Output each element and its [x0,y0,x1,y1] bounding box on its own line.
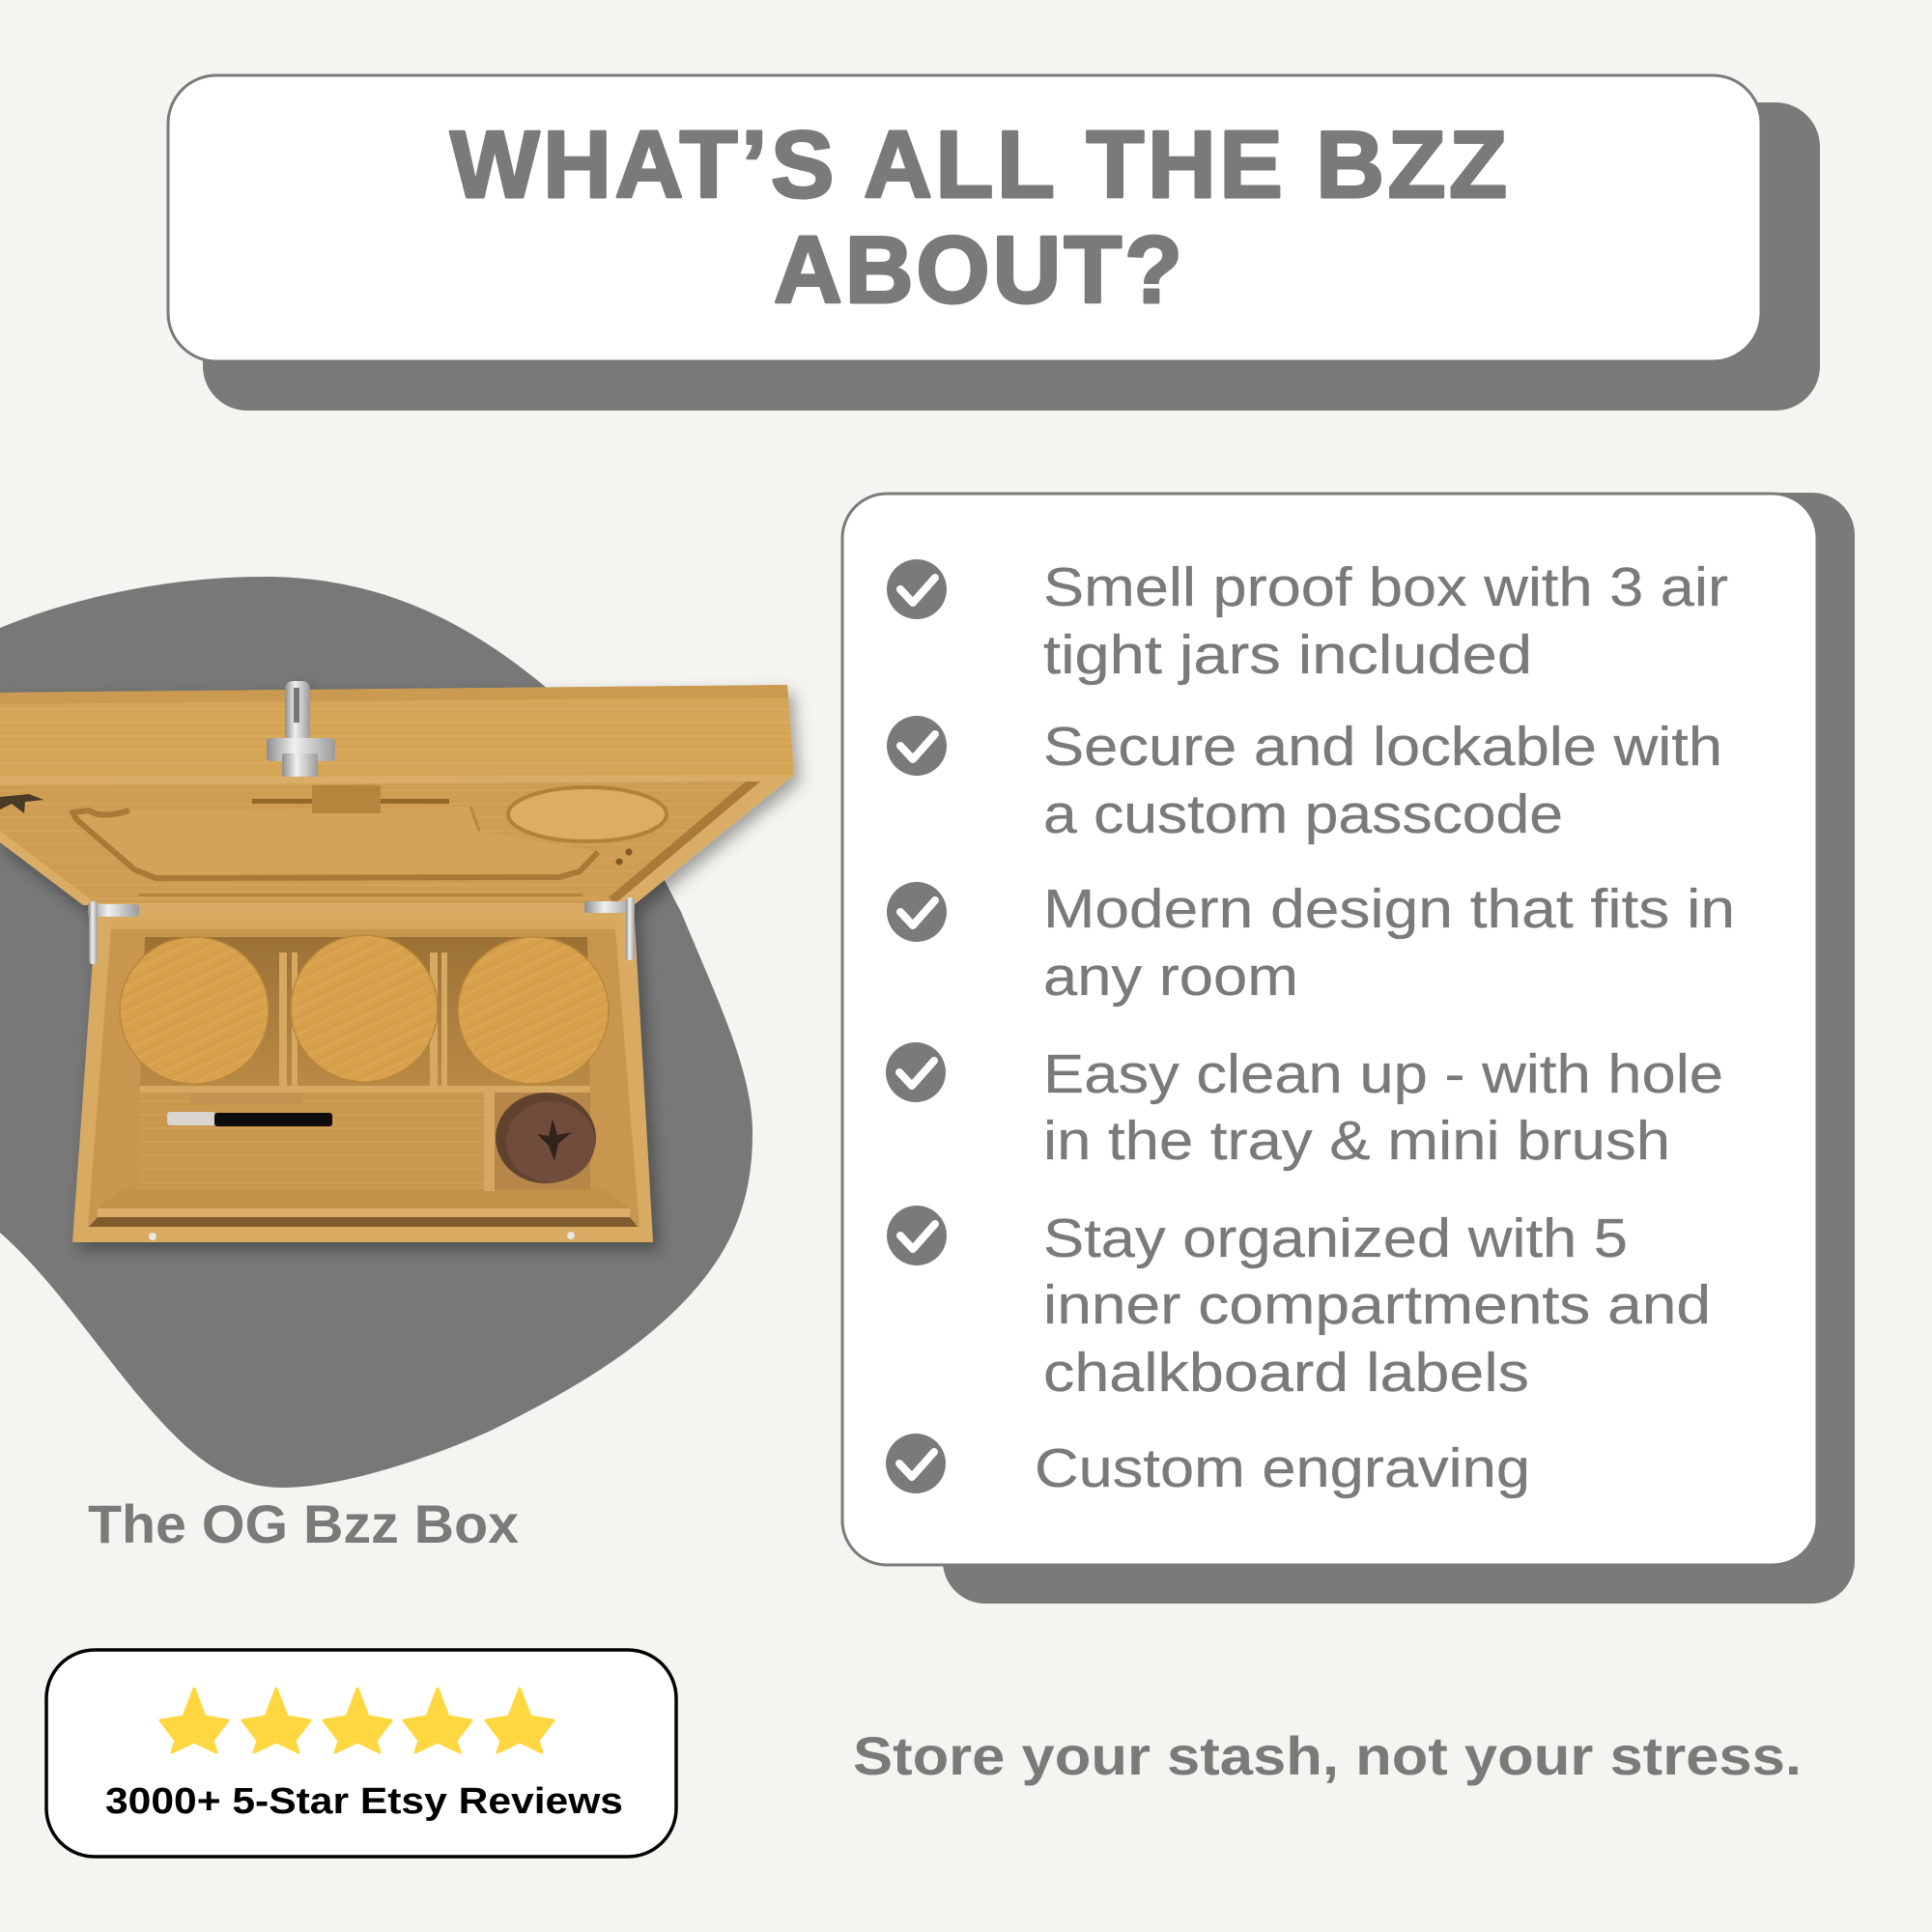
feature text 1: Smell proof box with 3 air [1043,556,1728,618]
lid bottom strip [138,894,582,896]
lid holes [616,848,632,866]
feature text 3: Modern design that fits in [1043,878,1735,940]
badge text: 3000+ 5-Star Etsy Reviews [105,1781,623,1822]
upper compartments [140,937,590,1087]
feature text 2: a custom passcode [1043,783,1563,845]
lid oval dish [508,787,667,841]
lid mark [0,794,43,813]
dividers [140,952,590,1191]
icon: five stars [160,1689,554,1752]
feature text 1: tight jars included [1043,624,1532,686]
feature 2 [887,716,1722,845]
latch [267,681,335,777]
feature text 4 [1043,1043,1723,1172]
feature text 5: inner compartments and [1043,1274,1711,1336]
icon: check 3 [887,882,947,942]
reviews badge [46,1650,676,1857]
title banner card [168,75,1761,361]
walnut jar [496,1093,596,1183]
feature text 5: chalkboard labels [1043,1342,1529,1404]
badge card [46,1650,676,1857]
feature text 4: Easy clean up - with hole [1043,1043,1723,1105]
icon: check 5 [887,1206,947,1265]
panel: features [842,493,1855,1604]
feature text 2 [1043,716,1722,845]
box body [72,905,653,1242]
feature text 2: Secure and lockable with [1043,716,1722,778]
feature 5 [887,1206,1711,1404]
lid slot and tab [252,785,449,813]
product photo: open bamboo box [0,681,794,1242]
walnut compartment [494,1093,590,1191]
title banner shadow [203,102,1820,411]
feature text 3: any room [1043,946,1298,1008]
title: WHAT’S ALL THE BZZ [450,111,1507,217]
icon: check 2 [887,716,947,776]
feature text 6: Custom engraving [1035,1437,1530,1499]
front ledge [98,1189,630,1208]
three jar lids [120,935,609,1084]
caption: The OG Bzz Box [88,1493,519,1554]
hinges [88,897,635,964]
feature text 4: in the tray & mini brush [1043,1110,1670,1172]
icon: check 4 [886,1042,946,1102]
features panel card [842,494,1817,1565]
lower floor [140,1090,590,1191]
features panel shadow [943,493,1855,1604]
mini brush [167,1112,332,1126]
lid tray recess [72,807,598,878]
grey blob backdrop [0,577,753,1488]
feature text 3 [1043,878,1735,1008]
feature text 1 [1043,556,1728,686]
box lid [0,685,794,905]
feature 1 [887,556,1728,686]
feature text 5: Stay organized with 5 [1043,1208,1628,1269]
title [450,111,1507,323]
icon: check 6 [886,1434,946,1493]
feature 6 [886,1434,1530,1499]
feature text 5 [1043,1208,1711,1404]
tagline: Store your stash, not your stress. [853,1725,1802,1786]
screws [149,1232,575,1240]
jar lid grain [120,935,609,1084]
title: ABOUT? [774,216,1182,323]
title banner [168,75,1820,411]
feature 4 [886,1042,1723,1172]
feature 3 [887,878,1735,1008]
icon: check 1 [887,559,947,619]
